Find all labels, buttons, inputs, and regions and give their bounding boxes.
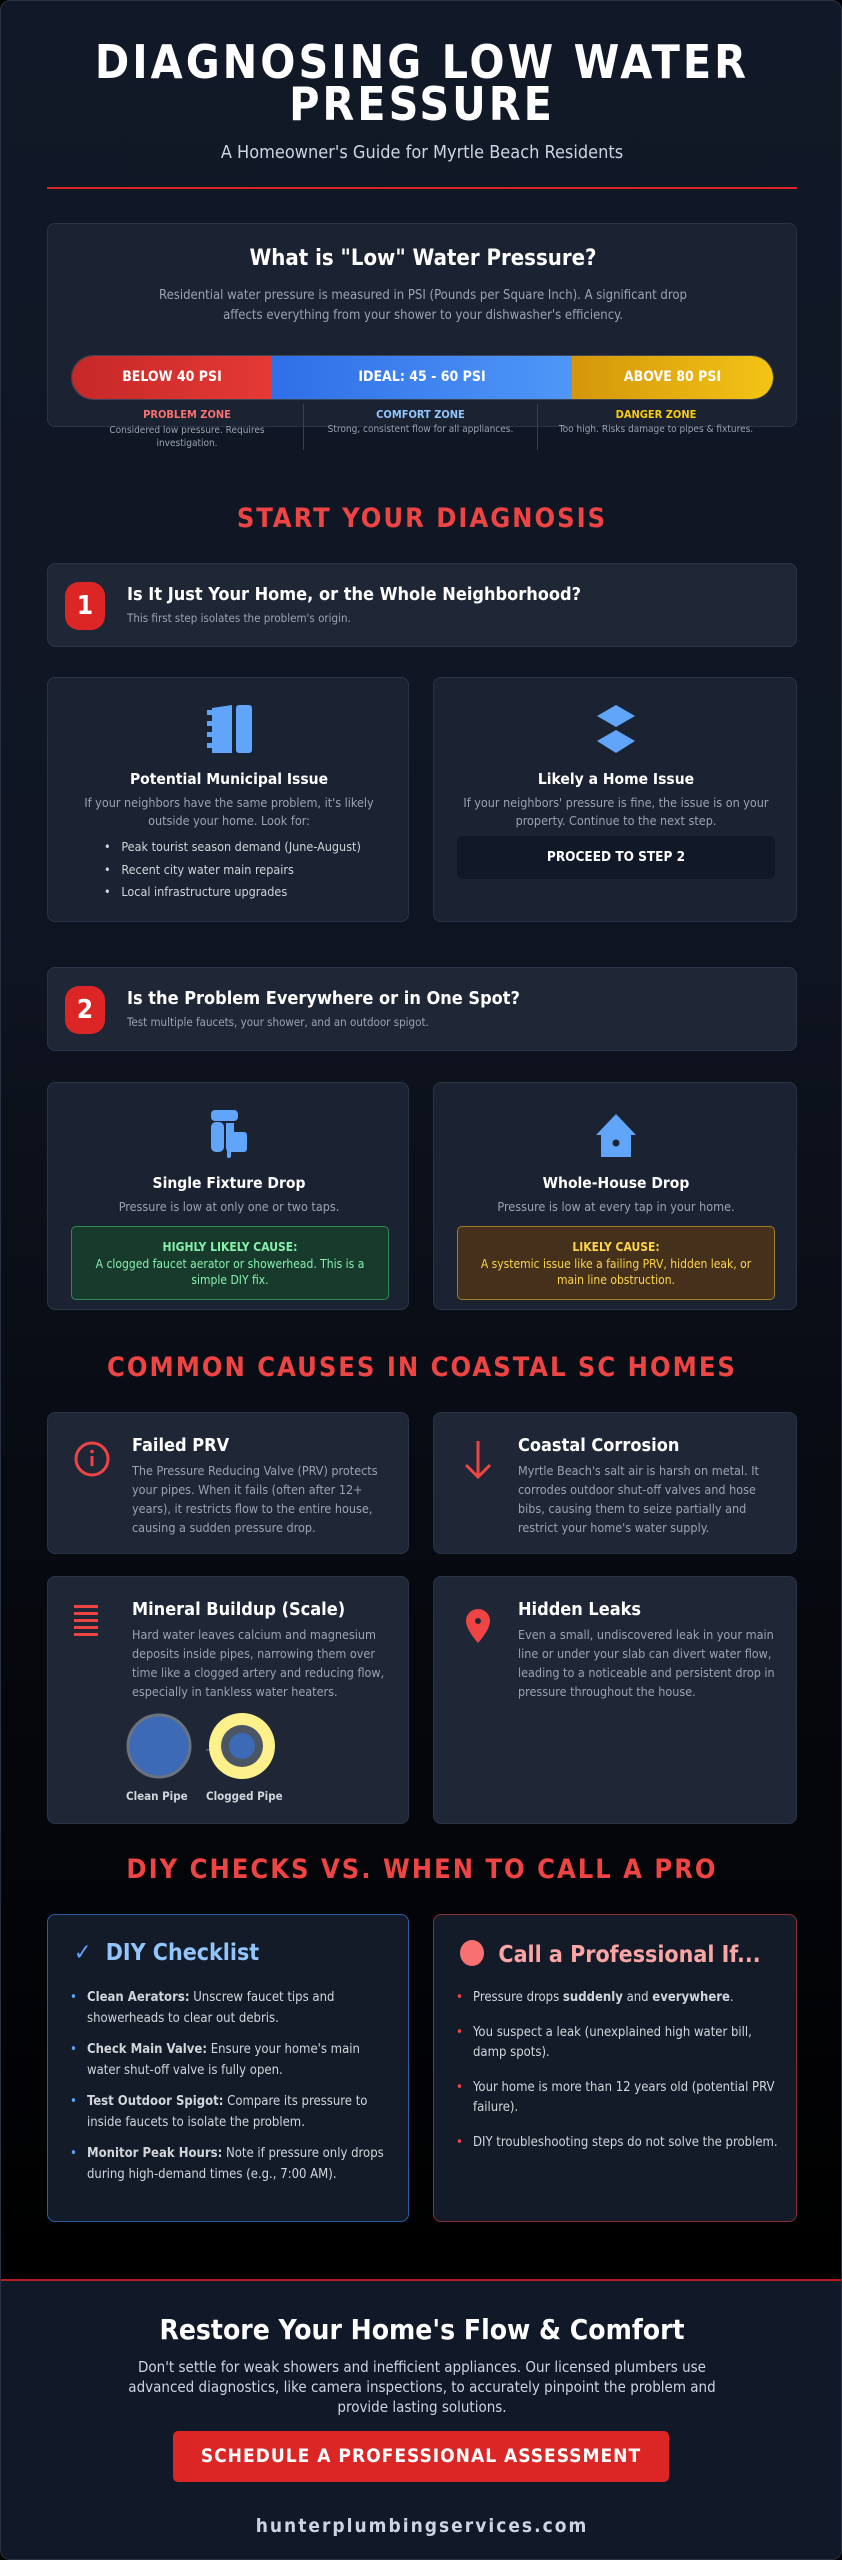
icon: down arrow: [465, 1441, 491, 1479]
list: •: [456, 2080, 463, 2094]
list: •: [70, 2146, 77, 2161]
cause: hidden leaks: [433, 1576, 797, 1824]
icon: building: [207, 705, 252, 753]
icon: info circle: [74, 1442, 110, 1476]
cause: failed PRV: [47, 1412, 409, 1554]
list: • Recent city water main repairs: [104, 862, 294, 876]
callout: likely cause: [457, 1226, 775, 1300]
list: •: [70, 1990, 77, 2005]
zone labels: [109, 404, 753, 450]
pressure bar: BELOW 40 PSI: [122, 369, 222, 385]
diagram: clean vs clogged pipe: →: [205, 1740, 218, 1759]
step 1: This first step isolates the problem's origin.: [127, 611, 351, 625]
list: •: [456, 2024, 463, 2040]
subtitle: A Homeowner's Guide for Myrtle Beach Residents: [221, 142, 623, 163]
icon: faucet: [211, 1110, 247, 1158]
list: Your home is more than 12 years old (potential PRV failure).: [473, 2080, 775, 2115]
section heading: DIY vs pro: DIY CHECKS VS. WHEN TO CALL A PRO: [126, 1854, 718, 1885]
panel: what is low pressure: [47, 223, 797, 427]
website: hunterplumbingservices.com: [256, 2515, 588, 2537]
list: •: [456, 1990, 463, 2005]
list: •: [456, 2134, 463, 2150]
callout: highly likely cause: [71, 1226, 389, 1300]
step 1: [47, 563, 797, 647]
card title: Likely a Home Issue: [538, 770, 694, 788]
button: proceed: [457, 836, 775, 879]
panel heading: What is "Low" Water Pressure?: [249, 246, 597, 271]
cause: failed PRV: The Pressure Reducing Valve (PRV) protects your pipes. When it fails (often after 12+ years), it restricts flow to the entire house, causing a sudden pressure drop.: [132, 1463, 378, 1535]
list: • Local infrastructure upgrades: [104, 884, 287, 899]
card text: If your neighbors have the same problem, it's likely outside your home. Look for:: [84, 795, 374, 828]
heading with check icon: ✓ DIY Checklist: [74, 1940, 259, 1966]
card: home issue: [433, 677, 797, 922]
list: [70, 1990, 384, 2182]
zone labels: COMFORT ZONE: [376, 408, 465, 421]
list: Check Main Valve: Ensure your home's main water shut-off valve is fully open.: [87, 2042, 360, 2078]
cause: mineral buildup: Mineral Buildup (Scale): [132, 1599, 345, 1620]
icon: diamonds: [597, 705, 635, 753]
footer: [1, 2279, 842, 2560]
section heading: start your diagnosis: START YOUR DIAGNOSIS: [237, 503, 607, 534]
list: [104, 839, 361, 899]
footer heading: Restore Your Home's Flow & Comfort: [159, 2313, 685, 2346]
cause: mineral buildup: Hard water leaves calcium and magnesium deposits inside pipes, narrowing them over time like a clogged artery and reducing flow, especially in tankless water heaters.: [132, 1627, 384, 1699]
heading with dot icon: Call a Professional If...: [498, 1942, 761, 1968]
title: DIAGNOSING LOW WATER: [95, 35, 749, 89]
list: •: [70, 2094, 77, 2109]
diagram: clean vs clogged pipe: [126, 1713, 283, 1803]
callout: highly likely cause: HIGHLY LIKELY CAUSE:: [163, 1240, 297, 1254]
title: PRESSURE: [289, 77, 555, 131]
card: municipal issue: [47, 677, 409, 922]
step 2: Is the Problem Everywhere or in One Spot?: [127, 988, 520, 1009]
cause: mineral buildup: [47, 1576, 409, 1824]
callout: highly likely cause: simple DIY fix.: [191, 1273, 269, 1287]
list: Clean Aerators: Unscrew faucet tips and showerheads to clear out debris.: [87, 1990, 334, 2026]
callout: likely cause: main line obstruction.: [557, 1273, 675, 1287]
card title: Potential Municipal Issue: [130, 770, 328, 788]
cause: coastal corrosion: [433, 1412, 797, 1554]
list: Pressure drops suddenly and everywhere.: [473, 1990, 734, 2005]
list: • Peak tourist season demand (June-August): [104, 839, 361, 854]
card text: Pressure is low at every tap in your home.: [497, 1199, 735, 1214]
button: proceed: PROCEED TO STEP 2: [547, 849, 685, 865]
panel: DIY checklist: [47, 1914, 409, 2222]
list: [456, 1990, 778, 2150]
list: Test Outdoor Spigot: Compare its pressure to inside faucets to isolate the problem.: [87, 2094, 367, 2130]
panel: call a professional: [433, 1914, 797, 2222]
diagram: clean vs clogged pipe: Clean Pipe: [126, 1789, 188, 1803]
callout: likely cause: A systemic issue like a failing PRV, hidden leak, or: [481, 1256, 751, 1270]
title: [95, 35, 749, 131]
section heading: common causes: COMMON CAUSES IN COASTAL SC HOMES: [107, 1352, 737, 1383]
panel description: Residential water pressure is measured in PSI (Pounds per Square Inch). A significant drop affects everything from your shower to your dishwasher's efficiency.: [159, 288, 687, 323]
card text: Pressure is low at only one or two taps.: [119, 1199, 339, 1214]
callout: highly likely cause: A clogged faucet aerator or showerhead. This is a: [96, 1256, 364, 1270]
cause: coastal corrosion: Coastal Corrosion: [518, 1435, 679, 1456]
zone labels: DANGER ZONE: [616, 408, 696, 421]
pressure bar: ABOVE 80 PSI: [624, 369, 721, 385]
step 2: 2: [77, 995, 93, 1025]
pressure bar: [71, 355, 774, 400]
zone labels: Strong, consistent flow for all appliances.: [328, 424, 513, 435]
button: schedule: SCHEDULE A PROFESSIONAL ASSESSMENT: [201, 2445, 641, 2467]
cause: hidden leaks: Even a small, undiscovered leak in your main line or under your slab can divert water flow, leading to a noticeable and persistent drop in pressure throughout the house.: [518, 1627, 775, 1699]
list: Monitor Peak Hours: Note if pressure only drops during high-demand times (e.g., 7:00 AM).: [87, 2146, 384, 2182]
zone labels: PROBLEM ZONE: [143, 408, 231, 421]
cause: coastal corrosion: Myrtle Beach's salt air is harsh on metal. It corrodes outdoor shut-off valves and hose bibs, causing them to seize partially and restrict your home's water supply.: [518, 1463, 759, 1535]
icon: house: [596, 1114, 636, 1157]
card text: If your neighbors' pressure is fine, the issue is on your property. Continue to the next step.: [463, 795, 769, 828]
card title: Whole-House Drop: [543, 1174, 689, 1192]
callout: likely cause: LIKELY CAUSE:: [572, 1240, 660, 1254]
cause: hidden leaks: Hidden Leaks: [518, 1599, 641, 1620]
card title: Single Fixture Drop: [153, 1174, 305, 1192]
step 1: Is It Just Your Home, or the Whole Neighborhood?: [127, 584, 581, 605]
diagram: clean vs clogged pipe: Clogged Pipe: [206, 1789, 283, 1803]
pressure bar: IDEAL: 45 - 60 PSI: [358, 369, 486, 385]
footer text: Don't settle for weak showers and inefficient appliances. Our licensed plumbers use advanced diagnostics, like camera inspections, to accurately pinpoint the problem and provide lasting solutions.: [128, 2358, 716, 2416]
zone labels: Too high. Risks damage to pipes & fixtures.: [559, 424, 753, 435]
list: DIY troubleshooting steps do not solve the problem.: [473, 2134, 778, 2150]
step 2: Test multiple faucets, your shower, and an outdoor spigot.: [127, 1015, 429, 1029]
step 2: [47, 967, 797, 1051]
icon: pin: [466, 1609, 490, 1643]
list: You suspect a leak (unexplained high water bill, damp spots).: [473, 2024, 752, 2060]
card: whole house: [433, 1082, 797, 1310]
cause: failed PRV: Failed PRV: [132, 1435, 229, 1456]
zone labels: Considered low pressure. Requires investigation.: [109, 425, 265, 449]
list: •: [70, 2042, 77, 2057]
button: schedule: [173, 2431, 669, 2482]
card: single fixture: [47, 1082, 409, 1310]
icon: lines: [74, 1605, 98, 1636]
step 1: 1: [77, 591, 93, 621]
